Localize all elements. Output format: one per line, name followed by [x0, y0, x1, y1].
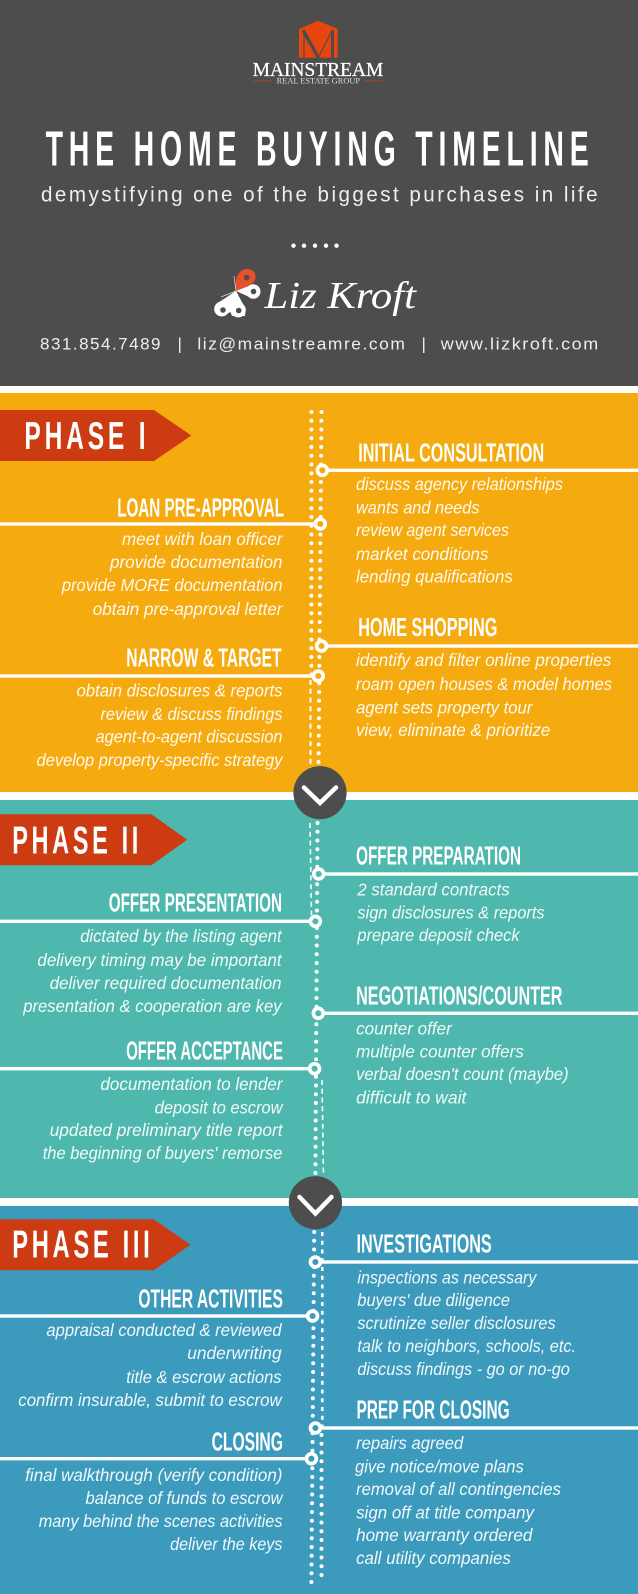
item: offer preparation: prepare deposit check — [356, 925, 521, 945]
item: prep for closing — [310, 1396, 638, 1568]
item: negotiations and counter: verbal doesn't count (maybe) — [356, 1064, 569, 1084]
item: home shopping — [317, 614, 638, 740]
item: offer presentation: dictated by the listing agent — [80, 926, 283, 946]
item: investigations: talk to neighbors, schools, etc. — [357, 1336, 576, 1356]
contact line: | — [178, 334, 183, 353]
item: prep for closing: home warranty ordered — [356, 1525, 534, 1545]
item: offer acceptance: updated preliminary title report — [50, 1120, 284, 1140]
item: prep for closing: give notice/move plans — [355, 1456, 524, 1476]
item: other activities: title & escrow actions — [126, 1367, 282, 1387]
item: offer acceptance: OFFER ACCEPTANCE — [126, 1037, 283, 1065]
contact line: | — [422, 334, 427, 353]
panel: phase 3 — [0, 1206, 638, 1594]
item: other activities: confirm insurable, submit to escrow — [18, 1390, 283, 1410]
logo: Mainstream Real Estate Group: REAL ESTATE GROUP — [277, 76, 361, 86]
item: closing: final walkthrough (verify condition) — [25, 1465, 282, 1485]
item: negotiations and counter — [313, 982, 638, 1107]
item: investigations: buyers' due diligence — [357, 1290, 510, 1310]
item: home shopping: view, eliminate & prioritize — [356, 720, 551, 740]
item: negotiations and counter: counter offer — [356, 1018, 453, 1038]
item: prep for closing: sign off at title company — [356, 1502, 535, 1522]
item: home shopping: HOME SHOPPING — [358, 614, 497, 642]
item: narrow and target: obtain disclosures & reports — [76, 681, 283, 701]
item: negotiations and counter: difficult to wait — [356, 1087, 468, 1107]
item: investigations: inspections as necessary — [357, 1267, 538, 1287]
item: offer presentation — [0, 890, 320, 1016]
item: initial consultation: lending qualifications — [356, 567, 513, 587]
item: other activities: appraisal conducted & reviewed — [46, 1320, 283, 1340]
contact line: 831.854.7489 — [40, 334, 162, 353]
item: offer presentation: delivery timing may be important — [37, 950, 283, 970]
item: offer preparation: 2 standard contracts — [356, 879, 510, 899]
item: initial consultation: review agent services — [356, 520, 509, 540]
item: offer acceptance: the beginning of buyers' remorse — [43, 1143, 283, 1163]
phase 1 banner — [0, 410, 191, 461]
item: prep for closing: PREP FOR CLOSING — [356, 1396, 510, 1424]
timeline dots phase 2 — [310, 823, 324, 1176]
item: home shopping: roam open houses & model homes — [356, 674, 612, 694]
item: offer presentation: deliver required documentation — [50, 973, 282, 993]
item: home shopping: agent sets property tour — [356, 697, 534, 717]
logo: Liz Kroft butterfly and name — [214, 269, 418, 318]
item: prep for closing: repairs agreed — [356, 1433, 464, 1453]
contact line — [40, 334, 600, 353]
item: offer acceptance: documentation to lender — [100, 1074, 284, 1094]
item: prep for closing: removal of all contingencies — [356, 1479, 561, 1499]
item: offer presentation: presentation & cooperation are key — [22, 996, 283, 1016]
item: narrow and target: review & discuss findings — [100, 704, 283, 724]
logo: Mainstream Real Estate Group: MAINSTREAM — [253, 59, 384, 81]
item: closing — [0, 1429, 316, 1554]
item: loan pre-approval: provide MORE documentation — [61, 575, 283, 595]
item: offer acceptance — [0, 1037, 320, 1163]
item: loan pre-approval: meet with loan officer — [122, 529, 284, 549]
item: offer preparation: sign disclosures & reports — [357, 902, 545, 922]
phase 1 banner: PHASE I — [24, 415, 149, 458]
item: closing: CLOSING — [212, 1429, 283, 1457]
item: offer preparation — [314, 842, 638, 945]
item: closing: deliver the keys — [170, 1534, 283, 1554]
phase 3 banner — [0, 1219, 190, 1270]
logo: Mainstream Real Estate Group — [253, 21, 384, 86]
item: offer acceptance: deposit to escrow — [155, 1097, 284, 1117]
item: narrow and target: agent-to-agent discussion — [96, 727, 282, 747]
arrow: phase 1 to phase 2 — [293, 766, 347, 819]
item: home shopping: identify and filter online properties — [356, 650, 612, 670]
item: investigations: scrutinize seller disclosures — [357, 1313, 556, 1333]
item: offer preparation: OFFER PREPARATION — [356, 842, 521, 870]
panel: phase 2 — [0, 800, 638, 1198]
timeline dots phase 3 — [311, 1232, 322, 1583]
subtitle: demystifying one of the biggest purchases in life — [41, 184, 600, 207]
item: initial consultation: discuss agency relationships — [356, 474, 563, 494]
item: investigations: INVESTIGATIONS — [356, 1231, 492, 1259]
item: loan pre-approval: LOAN PRE-APPROVAL — [117, 495, 284, 523]
phase 3 banner: PHASE III — [12, 1224, 153, 1267]
item: loan pre-approval: provide documentation — [109, 552, 283, 572]
item: narrow and target: NARROW & TARGET — [126, 645, 282, 673]
item: closing: balance of funds to escrow — [86, 1488, 284, 1508]
panel: phase 1 — [0, 393, 638, 792]
item: initial consultation: market conditions — [356, 544, 489, 564]
item: investigations: discuss findings - go or no-go — [357, 1359, 570, 1379]
dotted divider — [291, 244, 339, 248]
contact line: liz@mainstreamre.com — [197, 334, 406, 353]
timeline dots phase 1 — [310, 412, 322, 768]
header panel — [0, 0, 638, 386]
item: other activities: underwriting — [187, 1343, 282, 1363]
item: offer presentation: OFFER PRESENTATION — [109, 890, 282, 918]
arrow: phase 2 to phase 3 — [289, 1176, 342, 1229]
item: other activities: OTHER ACTIVITIES — [138, 1285, 283, 1313]
item: initial consultation — [317, 440, 638, 587]
item: prep for closing: call utility companies — [356, 1548, 511, 1568]
contact line: www.lizkroft.com — [440, 334, 600, 353]
item: narrow and target — [0, 645, 323, 770]
item: loan pre-approval: obtain pre-approval letter — [93, 599, 284, 619]
logo: Liz Kroft butterfly and name: Liz Kroft — [263, 275, 418, 317]
item: investigations — [310, 1231, 638, 1379]
item: initial consultation: wants and needs — [356, 497, 480, 517]
item: closing: many behind the scenes activities — [39, 1511, 283, 1531]
item: negotiations and counter: multiple counter offers — [356, 1041, 524, 1061]
item: loan pre-approval — [0, 495, 325, 619]
phase 2 banner: PHASE II — [12, 819, 142, 862]
item: narrow and target: develop property-specific strategy — [37, 750, 284, 770]
item: other activities — [0, 1285, 318, 1410]
phase 2 banner — [0, 814, 187, 865]
